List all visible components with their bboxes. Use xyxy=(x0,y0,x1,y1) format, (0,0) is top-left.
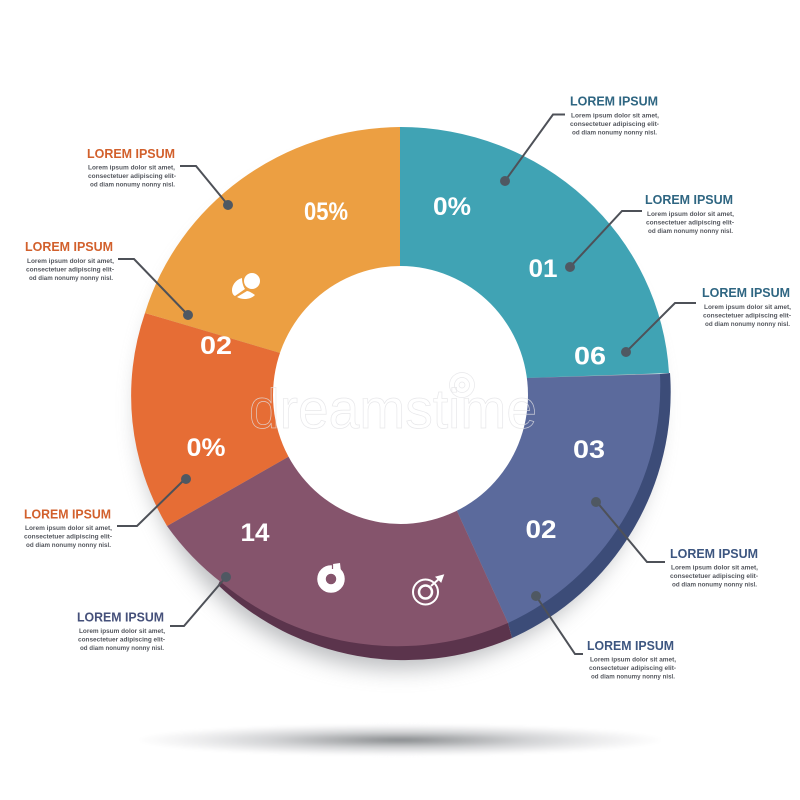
value: 0% orange: 0% xyxy=(186,434,226,462)
ring edge: purple xyxy=(218,560,512,660)
slice: purple xyxy=(167,395,508,646)
label: orange upper: od diam nonumy nonny nisl. xyxy=(29,275,113,282)
value: 01: 01 xyxy=(528,255,558,283)
value: 02 orange: 02 xyxy=(200,332,232,360)
label: amber xyxy=(87,146,176,188)
label: teal middle: consectetuer adipiscing elit- xyxy=(646,220,734,226)
leader: teal lower xyxy=(621,303,696,357)
label: blue lower xyxy=(587,638,676,680)
ring drop shadow xyxy=(139,151,657,669)
value: 0% teal: 0% xyxy=(433,193,471,221)
label: purple: consectetuer adipiscing elit- xyxy=(78,636,165,644)
label: blue upper: consectetuer adipiscing elit- xyxy=(670,573,758,580)
leader: orange upper xyxy=(118,259,193,320)
value: 05%: 05% xyxy=(304,198,348,226)
leader: amber xyxy=(180,166,233,210)
donut hole xyxy=(273,266,528,524)
value: 06: 06 xyxy=(574,342,606,370)
leader: teal top xyxy=(500,114,565,186)
label: blue upper: LOREM IPSUM xyxy=(670,546,758,561)
label: teal middle xyxy=(645,192,734,235)
leader: blue lower xyxy=(531,591,583,654)
label: teal middle: Lorem ipsum dolor sit amet, xyxy=(647,211,734,218)
label: orange upper: consectetuer adipiscing elit- xyxy=(26,266,114,274)
label: purple: Lorem ipsum dolor sit amet, xyxy=(79,628,165,635)
label: orange lower: od diam nonumy nonny nisl. xyxy=(26,542,111,549)
label: amber: od diam nonumy nonny nisl. xyxy=(90,182,175,188)
label: teal lower: od diam nonumy nonny nisl. xyxy=(705,321,790,328)
watermark: dreamstime xyxy=(249,377,537,440)
label: blue lower: LOREM IPSUM xyxy=(587,638,674,653)
label: amber: Lorem ipsum dolor sit amet, xyxy=(88,164,175,172)
label: purple: od diam nonumy nonny nisl. xyxy=(80,645,164,652)
leader: purple xyxy=(170,572,231,626)
icon: donut note xyxy=(322,563,341,588)
label: orange upper: Lorem ipsum dolor sit amet, xyxy=(27,258,114,265)
label: amber: consectetuer adipiscing elit- xyxy=(88,173,176,180)
label: teal lower xyxy=(702,285,791,328)
label: teal top: consectetuer adipiscing elit- xyxy=(570,121,659,128)
slice: orange xyxy=(131,313,400,526)
label: teal lower: Lorem ipsum dolor sit amet, xyxy=(704,304,791,311)
label: blue upper: od diam nonumy nonny nisl. xyxy=(672,582,757,588)
label: purple xyxy=(77,610,165,652)
value: 02 blue: 02 xyxy=(526,516,556,544)
icon: target with arrow xyxy=(413,575,444,604)
label: teal top: Lorem ipsum dolor sit amet, xyxy=(571,112,659,120)
label: teal top: od diam nonumy nonny nisl. xyxy=(572,130,657,136)
leader: orange lower xyxy=(117,474,191,526)
slice: teal xyxy=(400,127,669,395)
label: blue lower: consectetuer adipiscing elit- xyxy=(589,665,676,672)
label: blue upper xyxy=(670,546,758,588)
label: blue upper: Lorem ipsum dolor sit amet, xyxy=(671,564,758,572)
ring edge: blue xyxy=(508,373,671,638)
label: orange lower: Lorem ipsum dolor sit amet, xyxy=(25,525,112,532)
label: amber: LOREM IPSUM xyxy=(87,146,175,161)
value: 14: 14 xyxy=(240,519,270,547)
label: teal lower: consectetuer adipiscing elit- xyxy=(703,312,791,320)
label: orange upper: LOREM IPSUM xyxy=(25,239,113,254)
label: purple: LOREM IPSUM xyxy=(77,610,164,624)
label: blue lower: od diam nonumy nonny nisl. xyxy=(591,674,675,680)
label: orange lower: consectetuer adipiscing elit- xyxy=(24,534,112,540)
ground shadow xyxy=(135,724,665,756)
slice: blue xyxy=(400,374,660,623)
slice: amber xyxy=(145,127,400,395)
label: orange lower xyxy=(24,506,112,549)
label: teal middle: od diam nonumy nonny nisl. xyxy=(648,228,733,235)
label: blue lower: Lorem ipsum dolor sit amet, xyxy=(590,656,676,664)
value: 03: 03 xyxy=(573,436,605,464)
label: teal top: LOREM IPSUM xyxy=(570,94,658,108)
label: teal lower: LOREM IPSUM xyxy=(702,285,790,300)
label: orange upper xyxy=(25,239,114,282)
label: teal middle: LOREM IPSUM xyxy=(645,192,733,207)
label: teal top xyxy=(570,94,659,136)
leader: teal middle xyxy=(565,211,642,272)
donut chart xyxy=(131,127,671,660)
label: orange lower: LOREM IPSUM xyxy=(24,506,111,522)
icon: pie pieces xyxy=(232,273,260,299)
leader: blue upper xyxy=(591,497,665,562)
